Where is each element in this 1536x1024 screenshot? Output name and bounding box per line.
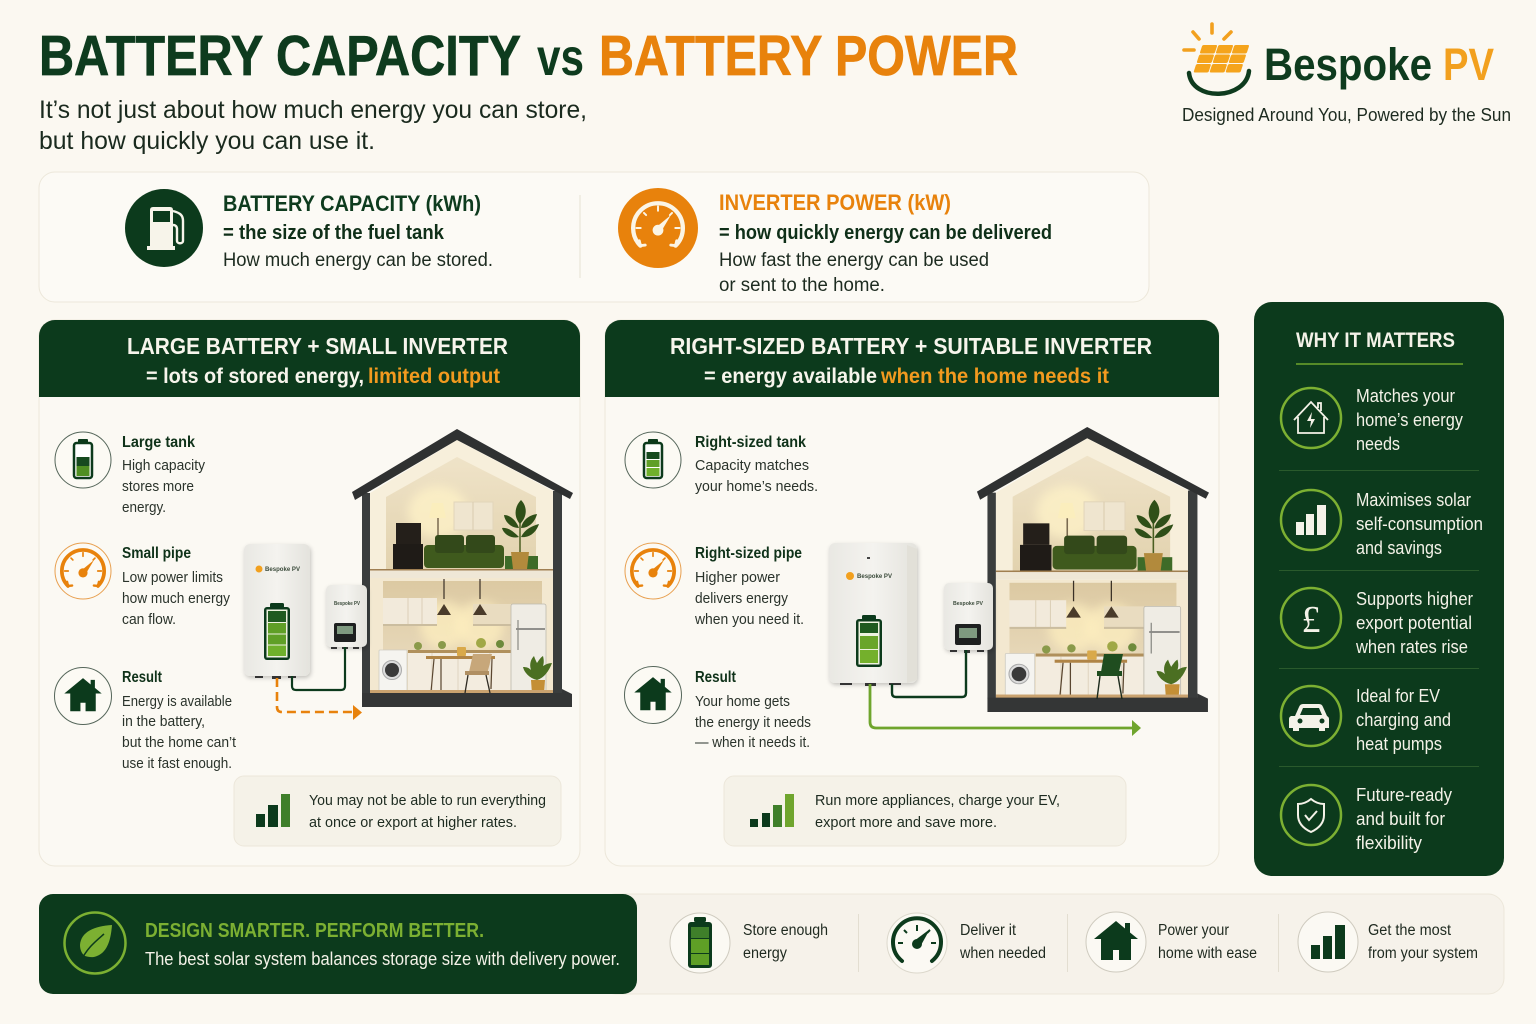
item: large tank (55, 432, 206, 516)
panel: right-sized battery suitable inverter (605, 320, 1219, 866)
item: right-sized pipe: Higher power (695, 570, 780, 586)
illustration: house cross-section (977, 427, 1209, 712)
banner: design smarter (39, 894, 637, 994)
panel: bottom strip (39, 894, 1504, 994)
illustration: large battery unit (244, 544, 310, 679)
subtitle: It’s not just about how much energy you can store, (39, 96, 587, 124)
item: large tank: stores more (122, 479, 194, 495)
item: deliver when needed: when needed (959, 945, 1046, 962)
subtitle: but how quickly you can use it. (39, 127, 375, 155)
item: large tank: High capacity (122, 458, 206, 474)
item: result: Result (695, 669, 736, 686)
title: vs (537, 29, 584, 87)
callout: limited: You may not be able to run everything (309, 792, 546, 809)
logo: Bespoke PV (1182, 24, 1511, 125)
icon: solar panel and sun rays (1184, 24, 1249, 94)
battery capacity text: How much energy can be stored. (223, 250, 493, 271)
item: right-sized tank: Right-sized tank (695, 434, 806, 451)
inverter power text: How fast the energy can be used (719, 250, 989, 271)
arrow: limited output (277, 678, 362, 720)
illustration: large battery unit: Bespoke PV (265, 567, 300, 573)
banner: design smarter: The best solar system balances storage size with delivery power. (145, 949, 620, 969)
reason: future-ready: and built for (1356, 809, 1445, 829)
item: small pipe (55, 543, 231, 628)
reason: self-consumption: and savings (1356, 538, 1442, 558)
inverter power text: INVERTER POWER (kW) (719, 190, 951, 215)
item: result: in the battery, (122, 714, 205, 730)
arrow: full output (870, 684, 1141, 736)
item: large tank: energy. (122, 500, 166, 516)
inverter power text: = how quickly energy can be delivered (719, 222, 1052, 244)
banner: design smarter: DESIGN SMARTER. PERFORM BETTER. (145, 920, 484, 942)
battery capacity text: = the size of the fuel tank (223, 222, 445, 244)
panel header (605, 320, 1219, 397)
item: result: the energy it needs (695, 715, 811, 731)
item: right-sized tank (625, 432, 818, 495)
tagline: Designed Around You, Powered by the Sun (1182, 105, 1511, 125)
reason: self-consumption (1281, 490, 1483, 558)
illustration: small inverter: Bespoke PV (334, 601, 361, 607)
item: right-sized tank: Capacity matches (695, 458, 809, 474)
inverter power text: or sent to the home. (719, 275, 885, 296)
item: small pipe: can flow. (122, 612, 176, 628)
reason: export potential: when rates rise (1355, 637, 1468, 657)
title (39, 24, 1018, 88)
item: small pipe: Low power limits (122, 570, 223, 586)
item: power your home (1086, 912, 1257, 972)
logo wordmark: Bespoke (1264, 39, 1432, 90)
panel header: limited output (368, 365, 500, 388)
reason: EV and heat pumps (1281, 686, 1451, 754)
reason: future-ready: flexibility (1356, 833, 1422, 853)
reason: self-consumption: self-consumption (1356, 514, 1483, 534)
item: power your home: home with ease (1158, 945, 1257, 962)
item: deliver when needed (887, 913, 1046, 973)
callout: benefits: export more and save more. (815, 814, 997, 831)
item: get the most (1298, 912, 1478, 972)
sidebar heading: WHY IT MATTERS (1296, 329, 1455, 352)
reason: EV and heat pumps: Ideal for EV (1356, 686, 1440, 706)
subtitle (39, 96, 587, 155)
item: result (54, 668, 236, 772)
item: result: Energy is available (122, 694, 232, 710)
item: get the most: from your system (1368, 945, 1478, 962)
panel header: when the home needs it (880, 365, 1109, 388)
panel header: = energy available (704, 365, 877, 388)
item: result: — when it needs it. (695, 735, 810, 751)
reason: self-consumption: Maximises solar (1356, 490, 1471, 510)
reason: export potential: Supports higher (1356, 589, 1473, 609)
reason: export potential: export potential (1356, 613, 1472, 633)
illustration: suitable inverter (944, 583, 993, 653)
item: right-sized pipe: when you need it. (694, 612, 804, 628)
reason: EV and heat pumps: charging and (1356, 710, 1451, 730)
item: store enough energy: Store enough (743, 922, 828, 939)
reason: matches home needs: home’s energy (1356, 410, 1463, 430)
item: result: use it fast enough. (122, 756, 232, 772)
reason: matches home needs: Matches your (1356, 386, 1455, 406)
reason: export potential (1281, 588, 1473, 657)
icon: orange gauge (618, 188, 698, 268)
title: BATTERY CAPACITY (39, 24, 521, 88)
panel header: LARGE BATTERY + SMALL INVERTER (127, 333, 508, 359)
item: power your home: Power your (1158, 922, 1229, 939)
panel: large battery small inverter (39, 320, 580, 866)
illustration: small inverter (326, 585, 367, 649)
item: deliver when needed: Deliver it (960, 922, 1017, 939)
item: right-sized pipe (625, 543, 804, 628)
item: small pipe: how much energy (122, 591, 231, 607)
illustration: house cross-section (352, 429, 573, 707)
item: result (624, 666, 811, 751)
cable: battery to inverter (292, 647, 345, 690)
item: store enough energy (670, 913, 828, 973)
icon: fuel pump (125, 189, 203, 267)
item: right-sized pipe: delivers energy (695, 591, 789, 607)
title: BATTERY POWER (599, 24, 1018, 88)
item: result: Your home gets (695, 694, 790, 710)
reason: matches home needs (1281, 386, 1463, 454)
item: right-sized pipe: Right-sized pipe (695, 545, 802, 562)
battery capacity text: BATTERY CAPACITY (kWh) (223, 191, 481, 216)
panel header: RIGHT-SIZED BATTERY + SUITABLE INVERTER (670, 333, 1152, 359)
illustration: suitable inverter: Bespoke PV (953, 601, 984, 607)
panel: why it matters (1254, 302, 1504, 876)
reason: future-ready: Future-ready (1356, 785, 1452, 805)
illustration: right-sized battery unit: Bespoke PV (857, 573, 893, 580)
logo: Bespoke PV: PV (1443, 39, 1494, 90)
panel header: = lots of stored energy, (146, 365, 364, 388)
item: small pipe: Small pipe (122, 545, 191, 562)
panel: definitions (39, 172, 1149, 302)
item: result: Result (122, 669, 162, 686)
panel header (39, 320, 580, 397)
illustration: right-sized battery unit (829, 543, 917, 686)
callout: benefits (724, 776, 1126, 846)
reason: future-ready (1281, 785, 1452, 853)
callout: benefits: Run more appliances, charge your EV, (815, 792, 1060, 809)
inverter power text (719, 190, 1052, 296)
callout: limited (234, 776, 561, 846)
item: store enough energy: energy (743, 945, 787, 962)
reason: EV and heat pumps: heat pumps (1356, 734, 1442, 754)
callout: limited: at once or export at higher rates. (309, 814, 517, 831)
cable: battery to inverter (892, 650, 966, 697)
reason: export potential: £ (1302, 599, 1320, 641)
item: result: but the home can’t (122, 735, 236, 751)
item: large tank: Large tank (122, 434, 195, 451)
item: right-sized tank: your home’s needs. (695, 479, 818, 495)
item: get the most: Get the most (1368, 922, 1452, 939)
battery capacity text (223, 191, 493, 271)
reason: matches home needs: needs (1356, 434, 1400, 454)
